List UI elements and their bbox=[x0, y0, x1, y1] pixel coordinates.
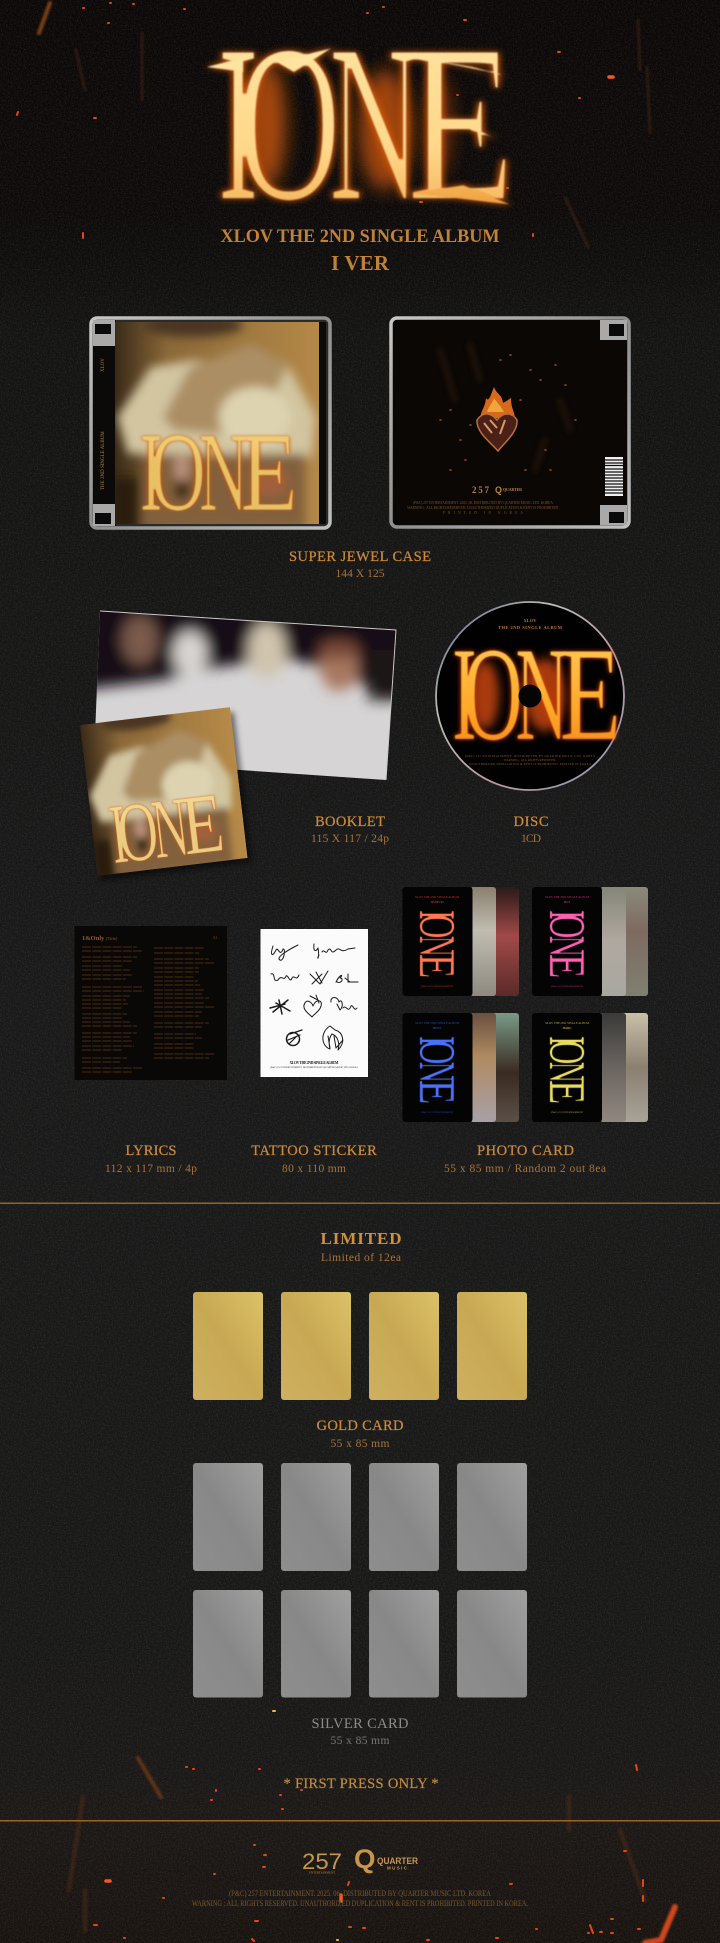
logo: quarter music bbox=[354, 1844, 418, 1874]
caption: super jewel case: SUPER JEWEL CASE bbox=[289, 549, 431, 565]
legal text: (P&C) 257 ENTERTAINMENT. 2025. 06. DISTRIBUTED BY QUARTER MUSIC LTD. KOREA bbox=[229, 1889, 491, 1898]
back cover legal text: PRINTED IN KOREA bbox=[443, 511, 523, 515]
panel: tattoo sticker bbox=[260, 929, 368, 1077]
logo lettering: E bbox=[406, 0, 516, 246]
cover logo: N bbox=[199, 411, 248, 534]
cover logo: E bbox=[240, 412, 298, 534]
corner tabs bbox=[600, 320, 627, 525]
disc legal text: WARNING : ALL RIGHTS RESERVED. bbox=[504, 758, 556, 762]
card text: XLOV THE 2ND SINGLE ALBUM bbox=[545, 1021, 589, 1025]
sticker caption: (P&C) 257 ENTERTAINMENT. DISTRIBUTED BY QUARTER MUSIC LTD. KOREA bbox=[270, 1066, 358, 1069]
sticker caption: XLOV THE 2ND SINGLE ALBUM bbox=[290, 1061, 339, 1065]
panel: photo card red bbox=[402, 887, 519, 996]
card text: HYUN bbox=[433, 1026, 442, 1030]
icon: flaming heart bbox=[477, 387, 517, 451]
card logo bbox=[538, 910, 595, 979]
card text: XLOV THE 2ND SINGLE ALBUM bbox=[415, 1021, 459, 1025]
logo ember interior bbox=[250, 63, 452, 190]
icon: barcode bbox=[605, 457, 623, 496]
disc title text: THE 2ND SINGLE ALBUM bbox=[498, 625, 563, 630]
lyrics title: 1&Only (Title) bbox=[82, 935, 118, 942]
caption: super jewel case: 144 X 125 bbox=[336, 568, 385, 580]
booklet cover logo: O bbox=[113, 785, 163, 881]
card logo: N bbox=[408, 1062, 464, 1083]
card text bbox=[415, 1021, 459, 1114]
heading: limited bbox=[320, 1229, 402, 1264]
panel: photo card pink bbox=[532, 887, 648, 996]
back cover legal text: WARNING : ALL RIGHTS RESERVED. UNAUTHORIZED DUPLICATION & RENT IS PROHIBITED. bbox=[407, 506, 559, 510]
card text: (P&C) 257 ENTERTAINMENT bbox=[551, 985, 584, 988]
card logo: N bbox=[538, 936, 594, 957]
panel: lyrics bbox=[74, 926, 227, 1080]
panel: booklet bbox=[80, 610, 396, 880]
booklet cover bbox=[76, 700, 252, 884]
logo lettering: N bbox=[328, 1, 422, 247]
back cover logos: QUARTER bbox=[503, 487, 522, 492]
caption: disc: 1CD bbox=[521, 833, 541, 845]
note: first press only: * FIRST PRESS ONLY * bbox=[284, 1776, 438, 1792]
heading: album title: XLOV THE 2ND SINGLE ALBUM bbox=[220, 226, 500, 247]
card text: WUMUTI bbox=[430, 900, 444, 904]
caption: super jewel case bbox=[289, 549, 431, 580]
cover logo: I bbox=[139, 412, 163, 535]
caption: booklet: 115 X 117 / 24p bbox=[311, 833, 389, 845]
card text: XLOV THE 2ND SINGLE ALBUM bbox=[415, 895, 459, 899]
disc logo: O bbox=[463, 620, 523, 768]
caption: gold card: 55 x 85 mm bbox=[330, 1438, 390, 1450]
caption: booklet: BOOKLET bbox=[315, 814, 385, 830]
heading: limited: Limited of 12ea bbox=[321, 1252, 401, 1264]
back cover logos bbox=[472, 485, 522, 495]
booklet cover logo: I bbox=[105, 788, 132, 881]
cover logo: O bbox=[150, 411, 206, 534]
caption: silver card: 55 x 85 mm bbox=[330, 1735, 390, 1747]
gold cards bbox=[193, 1292, 527, 1400]
caption: gold card: GOLD CARD bbox=[316, 1418, 404, 1434]
card logo bbox=[408, 1036, 465, 1105]
logo: quarter music: MUSIC bbox=[387, 1866, 408, 1870]
card logo: E bbox=[538, 953, 594, 979]
back cover embers bbox=[440, 345, 576, 470]
booklet cover logo bbox=[105, 776, 229, 882]
caption: booklet bbox=[311, 814, 389, 845]
card text: (P&C) 257 ENTERTAINMENT bbox=[421, 1111, 454, 1114]
heading: limited: LIMITED bbox=[320, 1229, 402, 1248]
spine: THE 2ND SINGLE ALBUM bbox=[101, 431, 106, 490]
disc logo: N bbox=[515, 621, 568, 769]
card logo: N bbox=[538, 1062, 594, 1083]
card logo: I bbox=[408, 1036, 465, 1046]
signature stickers bbox=[270, 944, 358, 1050]
card text: (P&C) 257 ENTERTAINMENT bbox=[421, 985, 454, 988]
back cover logos: 257 bbox=[472, 485, 490, 495]
disc title text: XLOV bbox=[523, 618, 537, 623]
logo: quarter music: QUARTER bbox=[377, 1856, 418, 1866]
card logo: I bbox=[538, 910, 595, 920]
disc title text bbox=[498, 618, 563, 630]
booklet cover logo: E bbox=[177, 777, 229, 873]
card logo: E bbox=[538, 1079, 594, 1105]
caption: tattoo sticker: 80 x 110 mm bbox=[282, 1163, 346, 1175]
disc logo ember bbox=[471, 659, 565, 731]
card logo: O bbox=[408, 914, 465, 939]
panel: photo card yellow bbox=[532, 1013, 648, 1122]
card text: RUI bbox=[564, 900, 571, 904]
caption: lyrics: 112 x 117 mm / 4p bbox=[105, 1163, 197, 1175]
caption: photo card: PHOTO CARD bbox=[477, 1143, 574, 1159]
card text bbox=[545, 1021, 589, 1114]
card logo bbox=[408, 910, 465, 979]
disc logo bbox=[452, 620, 622, 769]
caption: photo card bbox=[444, 1143, 606, 1175]
card logo: O bbox=[408, 1040, 465, 1065]
caption: tattoo sticker bbox=[251, 1143, 377, 1175]
card logo: E bbox=[408, 953, 464, 979]
legal text: WARNING : ALL RIGHTS RESERVED. UNAUTHORIZED DUPLICATION & RENT IS PROHIBITED. PRINTED IN KOREA. bbox=[192, 1899, 528, 1908]
logo lettering: O bbox=[236, 0, 342, 246]
cover art bbox=[115, 322, 326, 524]
back cover legal text bbox=[407, 501, 559, 515]
lyrics page number: 01 bbox=[213, 935, 218, 940]
card logo: I bbox=[408, 910, 465, 920]
cover logo bbox=[139, 411, 298, 535]
title logo bbox=[205, 0, 516, 247]
logo: quarter music: Q bbox=[354, 1844, 376, 1874]
disc hole bbox=[518, 684, 542, 708]
caption: silver card: SILVER CARD bbox=[312, 1716, 408, 1732]
disc logo: I bbox=[452, 622, 477, 768]
disc legal text: UNAUTHORIZED DUPLICATION & RENT IS PROHIBITED. PRINTED IN KOREA bbox=[469, 762, 592, 766]
disc logo: E bbox=[559, 620, 622, 768]
card text: XLOV THE 2ND SINGLE ALBUM bbox=[545, 895, 589, 899]
sticker caption bbox=[270, 1061, 358, 1069]
card text bbox=[545, 895, 589, 988]
card logo: N bbox=[408, 936, 464, 957]
caption: tattoo sticker: TATTOO STICKER bbox=[251, 1143, 377, 1159]
disc legal text: (P&C) 257 ENTERTAINMENT. DISTRIBUTED BY QUARTER MUSIC LTD. KOREA bbox=[465, 754, 596, 758]
caption: lyrics: LYRICS bbox=[126, 1143, 176, 1159]
caption: photo card: 55 x 85 mm / Random 2 out 8ea bbox=[444, 1163, 606, 1175]
caption: disc: DISC bbox=[514, 814, 548, 830]
silver cards bbox=[193, 1463, 527, 1698]
card logo: E bbox=[408, 1079, 464, 1105]
logo lettering bbox=[205, 0, 516, 247]
booklet spread bbox=[96, 610, 396, 780]
caption: disc bbox=[514, 814, 548, 845]
caption: gold card bbox=[316, 1418, 404, 1450]
caption: silver card bbox=[312, 1716, 408, 1747]
spine bbox=[93, 320, 116, 526]
panel: disc bbox=[436, 602, 624, 790]
logo: 257 entertainment: ENTERTAINMENT bbox=[309, 1872, 335, 1874]
card logo: O bbox=[538, 914, 595, 939]
card text bbox=[415, 895, 459, 988]
panel: jewel case back bbox=[391, 318, 629, 527]
heading: version: I VER bbox=[331, 251, 390, 275]
panel: photo card blue bbox=[402, 1013, 519, 1122]
card logo: I bbox=[538, 1036, 595, 1046]
lyrics columns bbox=[82, 947, 214, 1072]
back cover legal text: (P&C) 257 ENTERTAINMENT. 2025. 06. DISTRIBUTED BY QUARTER MUSIC LTD. KOREA bbox=[413, 501, 553, 505]
card logo: O bbox=[538, 1040, 595, 1065]
booklet cover logo: N bbox=[147, 780, 193, 876]
legal text bbox=[192, 1889, 528, 1908]
logo: 257 entertainment: 257 bbox=[302, 1849, 342, 1874]
card text: HARU bbox=[563, 1026, 572, 1030]
logo lettering: I bbox=[216, 0, 260, 247]
card text: (P&C) 257 ENTERTAINMENT bbox=[551, 1111, 584, 1114]
panel: jewel case front bbox=[91, 313, 330, 535]
disc legal text bbox=[465, 754, 596, 766]
card logo bbox=[538, 1036, 595, 1105]
spine: XLOV bbox=[101, 358, 106, 372]
caption: lyrics bbox=[105, 1143, 197, 1175]
back cover logos: Q bbox=[495, 485, 502, 495]
